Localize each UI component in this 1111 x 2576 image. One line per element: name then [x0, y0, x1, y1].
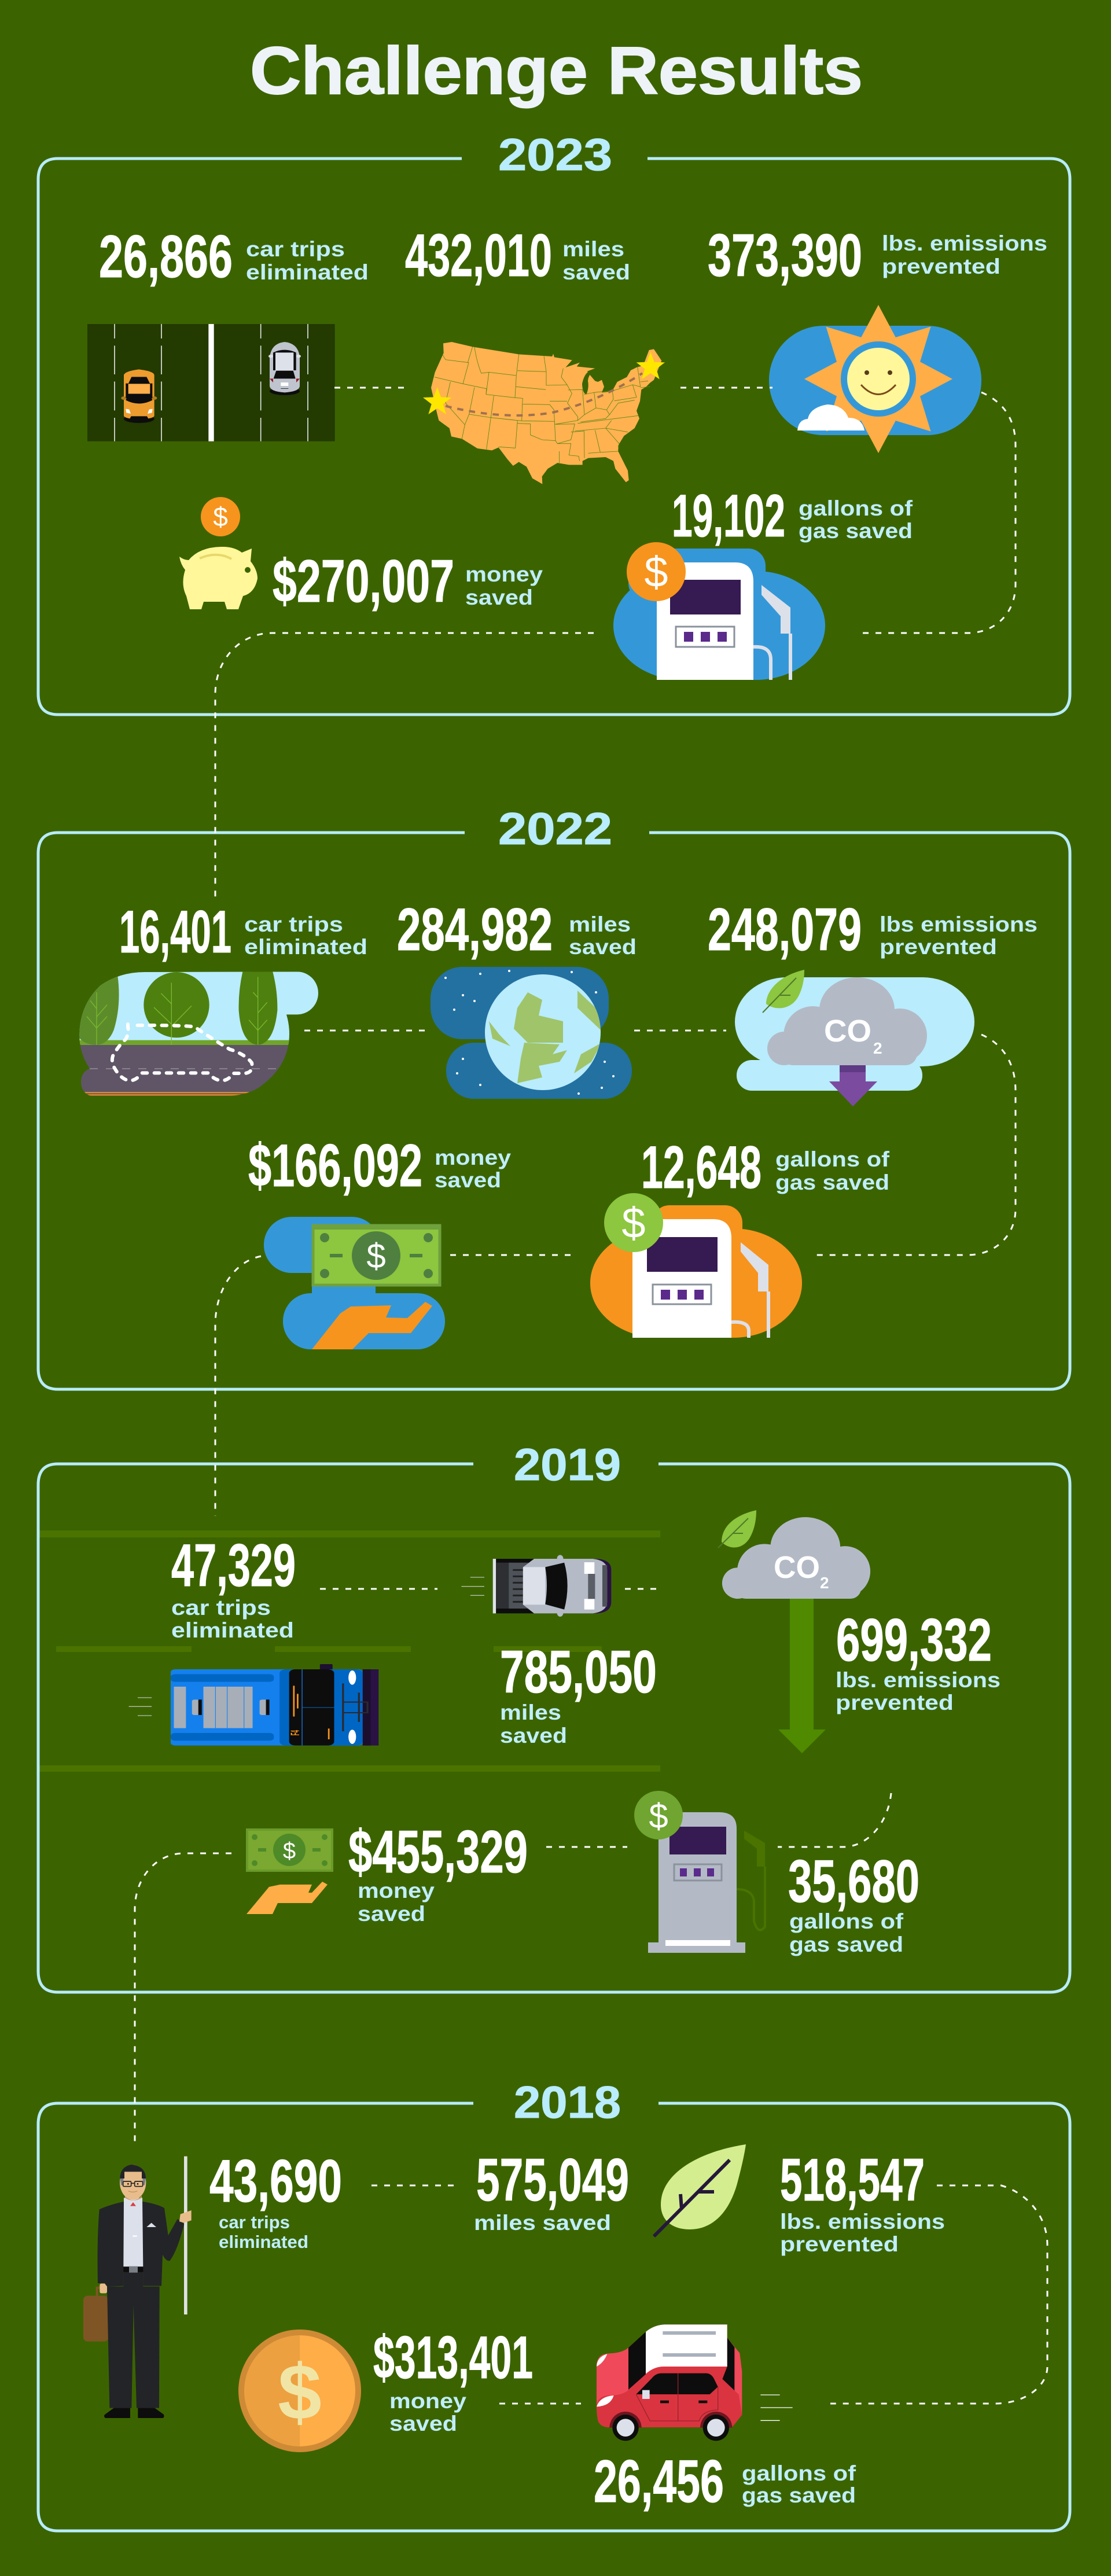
banknote: $	[366, 1237, 386, 1275]
CO2 label: 2	[820, 1574, 829, 1592]
stat: gallons saved 2022: gallons of	[775, 1147, 890, 1171]
panel: 2018	[38, 2077, 1070, 2531]
stat: emissions prevented 2022: prevented	[880, 935, 997, 959]
icon: pickup truck top view	[461, 1555, 611, 1617]
panel frame 2023	[38, 159, 1070, 715]
road stripes	[39, 1530, 660, 1772]
stat: money saved 2019: money	[358, 1879, 435, 1902]
stat: gallons saved 2023: gallons of	[799, 496, 913, 520]
icon: blue bus top view	[129, 1664, 378, 1746]
stat: car trips eliminated 2018: eliminated	[219, 2232, 308, 2252]
stat: car trips eliminated 2023: eliminated	[246, 260, 369, 284]
coin	[634, 1791, 683, 1839]
connector: car trips to miles	[371, 2185, 454, 2186]
stat: car trips eliminated 2019: car trips	[171, 1596, 271, 1620]
icon: CO2 cloud with arrow and leaf	[735, 970, 974, 1106]
panel frame 2018	[38, 2103, 1070, 2531]
icon: US map with route	[423, 342, 665, 484]
connector: globe to cloud	[634, 1030, 726, 1031]
stat: emissions prevented 2019: 699,332	[836, 1607, 992, 1674]
stat: car trips eliminated 2019	[171, 1532, 296, 1642]
stat: emissions prevented 2018: prevented	[780, 2232, 899, 2256]
panel: 2022	[38, 803, 1070, 1389]
icon: CO2 cloud with arrow and leaf	[718, 1510, 870, 1753]
stat: gallons saved 2023: 19,102	[672, 483, 785, 550]
heading: 2023: 2023	[498, 129, 612, 180]
coin: $	[644, 548, 668, 596]
panel frame 2019	[38, 1464, 1070, 1992]
stat: emissions prevented 2018: lbs. emissions	[780, 2210, 945, 2233]
stat: gallons saved 2018: 26,456	[594, 2448, 724, 2515]
cloud	[722, 1517, 870, 1599]
stat: car trips eliminated 2018: car trips	[219, 2212, 290, 2232]
stat: emissions prevented 2019: lbs. emissions	[836, 1668, 1000, 1692]
connector: pump to banknote	[450, 1254, 575, 1256]
figure: man in suit with pointer and briefcase	[83, 2157, 192, 2418]
icon: gold dollar coin: $	[278, 2348, 322, 2436]
icon: road with trees and loop	[75, 966, 326, 1097]
hand	[312, 1302, 432, 1349]
icon: star east	[637, 352, 665, 379]
heading: 2019: 2019	[514, 1439, 621, 1490]
stat: money saved 2019	[348, 1819, 528, 1926]
stat: money saved 2018	[373, 2324, 533, 2435]
stat: money saved 2022: saved	[435, 1168, 501, 1192]
stat: car trips eliminated 2018: 43,690	[209, 2148, 342, 2215]
connector: 2019 banknote to 2018	[135, 1853, 231, 2144]
icon: piggy bank with coin	[179, 497, 257, 609]
icon: piggy bank with coin: $	[213, 502, 228, 532]
connector: highway to map	[334, 387, 411, 389]
stat: miles saved 2019: miles	[500, 1701, 561, 1724]
stat: money saved 2023: money	[465, 562, 543, 586]
cloud	[767, 977, 927, 1065]
icon: gas pump on blue with coin	[613, 542, 825, 680]
icon: smiling sun on blue	[769, 305, 981, 453]
connector: road to globe	[304, 1030, 425, 1031]
stat: money saved 2023: saved	[465, 586, 533, 609]
stat: emissions prevented 2023: 373,390	[708, 222, 862, 289]
stat: gallons saved 2023: gas saved	[799, 519, 913, 543]
icon: banknote and hand on blue	[264, 1217, 445, 1349]
connector: arrow to pump	[778, 1793, 891, 1847]
stat: miles saved 2019: saved	[500, 1724, 567, 1747]
stat: gallons saved 2019	[788, 1848, 919, 1956]
stat: miles saved 2022: 284,982	[397, 896, 553, 963]
coin	[604, 1193, 663, 1252]
coin: $	[621, 1199, 646, 1247]
stat: car trips eliminated 2023: car trips	[246, 237, 345, 261]
connector: emissions to car	[830, 2185, 1047, 2404]
stat: miles saved 2023: miles	[562, 237, 624, 261]
CO2 label: 2	[873, 1039, 882, 1057]
panel: 2023	[38, 129, 1070, 715]
banknote	[247, 1830, 332, 1871]
stat: gallons saved 2018: gas saved	[742, 2483, 856, 2507]
connector: pump to money	[546, 1846, 627, 1848]
stat: emissions prevented 2022: 248,079	[708, 896, 862, 963]
stat: money saved 2018: $313,401	[373, 2324, 533, 2391]
silver car	[268, 342, 301, 395]
stat: car trips eliminated 2023: 26,866	[99, 223, 233, 290]
cloud	[797, 404, 864, 430]
leaf	[763, 970, 804, 1013]
icon: globe on starry blue	[431, 967, 632, 1099]
arrow down	[778, 1599, 826, 1753]
icon: red car with luggage on roof	[597, 2324, 793, 2441]
stat: gallons saved 2019: gallons of	[789, 1909, 904, 1933]
stat: money saved 2023: $270,007	[273, 548, 454, 615]
orange car	[121, 369, 157, 423]
stat: miles saved 2018	[474, 2147, 629, 2235]
stat: miles saved 2019	[500, 1639, 657, 1747]
stat: car trips eliminated 2022: 16,401	[119, 899, 231, 966]
stat: gallons saved 2022: gas saved	[775, 1171, 889, 1194]
stat: gallons saved 2018: gallons of	[742, 2461, 856, 2485]
stat: gallons saved 2019: 35,680	[788, 1848, 919, 1915]
arrow down	[829, 1065, 877, 1106]
stat: money saved 2019: saved	[358, 1902, 425, 1926]
icon: blue bus top view: F4	[289, 1730, 302, 1735]
icon: banknote and hand	[247, 1830, 332, 1914]
heading: 2022: 2022	[498, 803, 612, 854]
stat: money saved 2019: $455,329	[348, 1819, 528, 1886]
stat: emissions prevented 2019	[836, 1607, 1000, 1714]
stat: emissions prevented 2022: lbs emissions	[880, 912, 1038, 936]
CO2 label: CO	[824, 1014, 871, 1048]
connector: 2022 cloud to pump	[815, 1035, 1016, 1255]
coin: $	[649, 1797, 668, 1835]
connector: 2022 banknote to 2019	[215, 1256, 261, 1516]
stat: car trips eliminated 2023	[99, 223, 369, 290]
stat: miles saved 2018: 575,049	[476, 2147, 629, 2214]
panel: 2019	[38, 1439, 1070, 1992]
CO2 label	[824, 1014, 882, 1057]
connector: truck to cloud	[625, 1588, 657, 1590]
stat: car trips eliminated 2018	[209, 2148, 342, 2252]
icon: gray gas pump with coin	[634, 1791, 765, 1953]
CO2 label: CO	[774, 1550, 820, 1585]
icon: highway with two cars	[87, 324, 335, 441]
banknote	[313, 1226, 440, 1285]
connector: 2023 sun to pump	[860, 392, 1016, 633]
stat: emissions prevented 2022	[708, 896, 1038, 963]
stat: money saved 2022: money	[435, 1146, 511, 1169]
stat: emissions prevented 2019: prevented	[836, 1691, 954, 1714]
icon: gold dollar coin	[238, 2330, 361, 2452]
icon: star west	[423, 387, 451, 414]
panel frame 2022	[38, 833, 1070, 1389]
stat: miles saved 2022: miles	[569, 912, 631, 936]
stat: money saved 2018: saved	[389, 2412, 457, 2435]
icon: gas pump on orange with coin	[590, 1193, 802, 1338]
stat: emissions prevented 2023: prevented	[882, 255, 1000, 278]
hand	[247, 1882, 328, 1914]
stat: money saved 2018: money	[389, 2389, 466, 2413]
connector: 2023 pump to 2022 road	[215, 633, 594, 897]
connector: car trips to truck	[320, 1588, 437, 1590]
stat: gallons saved 2019: gas saved	[789, 1933, 903, 1956]
stat: miles saved 2023: saved	[562, 260, 630, 284]
icon: leaf	[654, 2144, 746, 2236]
stat: emissions prevented 2018	[780, 2147, 945, 2256]
stat: car trips eliminated 2022: car trips	[244, 912, 343, 936]
stat: emissions prevented 2018: 518,547	[780, 2147, 925, 2214]
stat: car trips eliminated 2019: 47,329	[171, 1532, 296, 1599]
stat: car trips eliminated 2019: eliminated	[171, 1618, 294, 1642]
stat: money saved 2022: $166,092	[248, 1132, 422, 1199]
connector: map to sun	[680, 387, 772, 389]
stat: car trips eliminated 2022: eliminated	[244, 935, 367, 959]
stat: miles saved 2019: 785,050	[500, 1639, 657, 1706]
stat: gallons saved 2022: 12,648	[641, 1134, 761, 1201]
stat: emissions prevented 2023	[708, 222, 1047, 289]
coin	[627, 542, 686, 601]
title: Challenge Results	[250, 33, 863, 108]
stat: miles saved 2022: saved	[569, 935, 637, 959]
connector: money to car	[499, 2402, 581, 2405]
leaf	[718, 1510, 756, 1548]
stat: emissions prevented 2023: lbs. emissions	[882, 231, 1047, 255]
heading: 2018: 2018	[514, 2077, 621, 2128]
banknote: $	[283, 1838, 296, 1864]
stat: miles saved 2023: 432,010	[405, 222, 552, 289]
stat: miles saved 2018: miles saved	[474, 2211, 611, 2235]
